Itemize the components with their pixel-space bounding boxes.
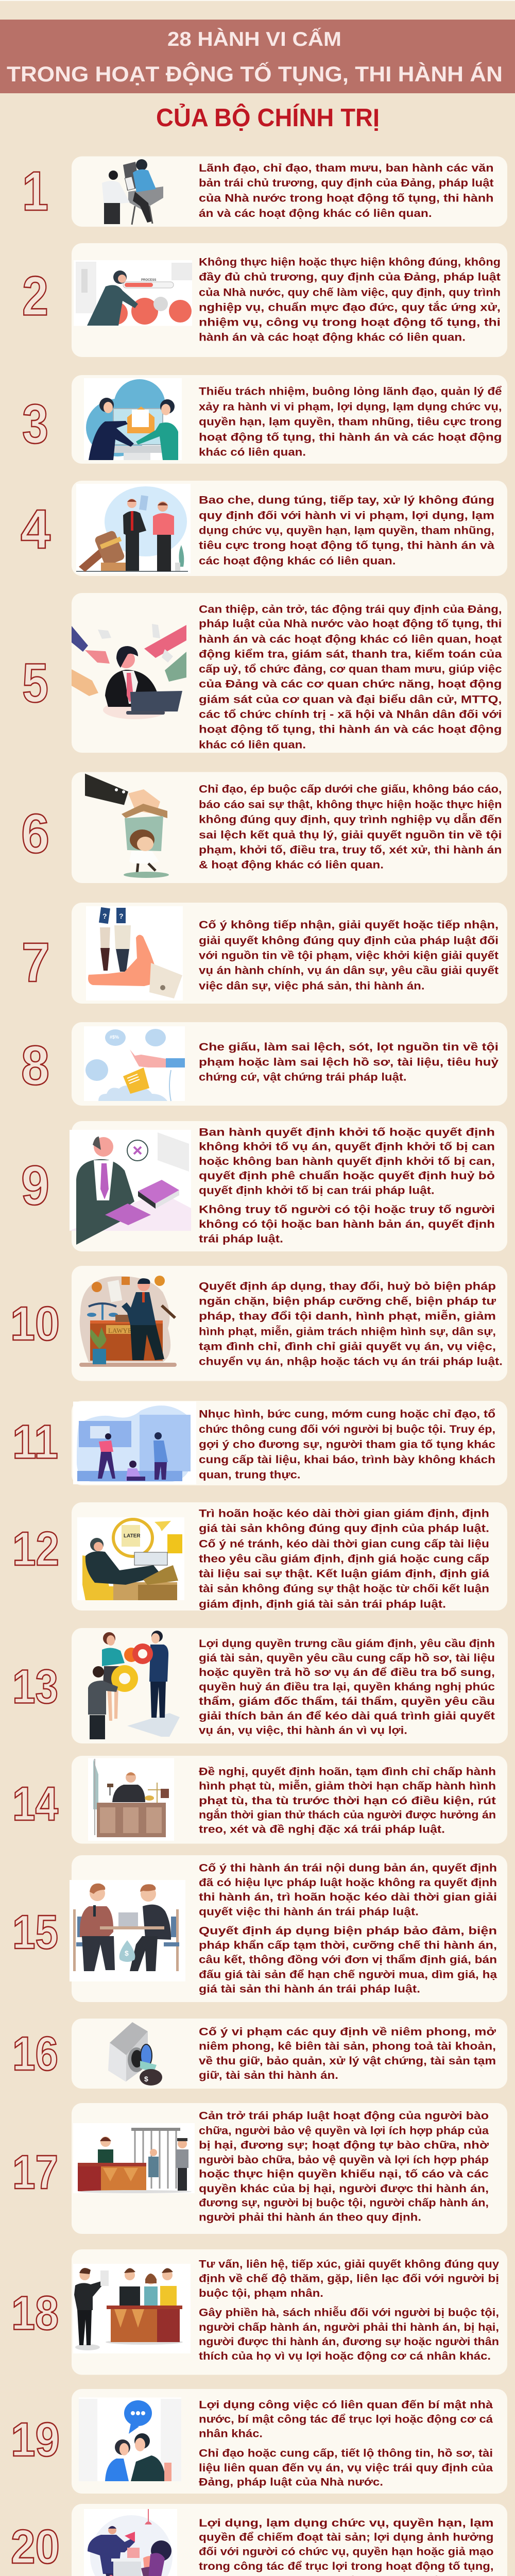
illustration: hand hiding a document [84,1026,185,1101]
number 10: 10 [10,1297,60,1350]
rule 20 text: đối với người có chức vụ, quyền hạn hoặc giả mạo [199,2546,493,2557]
rule 4 text: quy định đối với hành vi vi phạm, lợi dụng, lạm [199,510,494,521]
illustration: lawyer at a desk: LAWYER [108,1327,136,1334]
illustration: two men shaking hands before a monitor [84,378,182,460]
illustration: boss shouting through a megaphone [84,2509,177,2576]
rule 11 text: Nhục hình, bức cung, mớm cung hoặc chỉ đạo, tổ [199,1409,495,1420]
rule 17 text: Cản trở trái pháp luật hoạt động của người bào [199,2110,489,2122]
card 15 background [72,1855,507,2002]
rule 5 text: động kiểm tra, giám sát, thanh tra, kiểm toán của [199,648,502,660]
panel: rule 14 [12,1756,507,1843]
rule 1 text: án và các hoạt động khác có liên quan. [199,208,432,219]
rule 16 text [199,2026,496,2081]
illustration: man procrastinating by a clock [77,1517,184,1600]
rule 9 text: trái pháp luật. [199,1233,283,1245]
illustration: students in a school hallway [73,1401,196,1484]
rule 3 text: xảy ra hành vi vi phạm, lợi dụng, lạm dụng chức vụ, [199,401,502,413]
illustration: official rejecting at a desk [70,1130,191,1245]
panel: rule 3 [22,375,507,464]
rule 5 text: các tổ chức chính trị - xã hội và Nhân dân đối với [199,709,502,720]
rule 5 text: của Đảng và các cơ quan chức năng, hoạt động [199,678,502,690]
illustration: three colleagues with gears [88,1631,180,1739]
number 2: 2 [22,265,48,327]
rule 9 text [199,1126,495,1245]
rule 15 text: thi hành án, trì hoãn hoặc kéo dài thời gian giải [199,1891,497,1903]
illustration: two men exchanging a money bag [70,1880,185,1981]
rule 17 text: đương sự, người bị buộc tội, người chấp hành án, [199,2197,489,2209]
number 12: 12 [12,1522,59,1575]
rule 9 text: quyết định phê chuẩn hoặc quyết định huỷ bỏ [199,1170,495,1182]
card 4 background [72,481,507,576]
rule 2 text [199,257,501,343]
rule 12 text: giá tài sản không đúng quy định của pháp luật. [199,1523,489,1534]
rule 9 text: không có tội hoặc ban hành bản án, quyết định [199,1218,495,1230]
rule 10 text [199,1281,503,1367]
rule 6 text: không đúng quy định, quy trình nghiệp vụ dẫn đến [199,813,502,825]
number 4: 4 [21,498,50,560]
illustration: lawyer bench, jail bars and guard [73,2123,195,2193]
rule 10 text: pháp, thay đổi tội danh, hình phạt, miễn, giảm [199,1310,496,1322]
illustration: two people on a big hand [86,906,183,1001]
panel: rule 6 [21,772,507,883]
rule 17 text: người phải thi hành án theo quy định. [199,2211,421,2224]
number 6: 6 [21,802,49,865]
rule 2 text: nhiệm vụ, công vụ trong hoạt động tố tụng, thi [199,316,501,329]
card 6 background [72,772,507,883]
panel: rule 19 [11,2389,507,2494]
illustration: stressed man surrounded by hands [72,624,186,719]
rule 2 text: hành án và các hoạt động khác có liên quan. [199,332,466,343]
panel: rule 2 [22,243,507,357]
title line 2: TRONG HOẠT ĐỘNG TỐ TỤNG, THI HÀNH ÁN [7,61,503,86]
number 14: 14 [12,1777,58,1831]
illustration: two colleagues at a desk [102,159,163,225]
rule 6 text [199,783,502,871]
illustration: courtroom scene [73,2264,191,2353]
card 5 background [72,593,507,753]
illustration: gavel and two men [76,484,191,573]
rule 1 text: bản trái chủ trương, quy định của Đảng, pháp luật [199,177,493,189]
rule 15 text: Quyết định áp dụng biện pháp bảo đảm, biện [199,1925,497,1937]
illustration: washing machine and money bag: $ [144,2075,148,2083]
panel: rule 12 [12,1502,507,1611]
rule 2 text: Không thực hiện hoặc thực hiện không đúng, không [199,257,501,268]
rule 10 text: Quyết định áp dụng, thay đổi, huỷ bỏ biện pháp [199,1281,496,1292]
rule 15 text: đã có hiệu lực pháp luật hoặc không ra quyết định [199,1877,497,1889]
rule 15 text: đấu giá tài sản để hạn chế người mua, dìm giá, hạ [199,1969,497,1980]
rule 18 text: thích của họ vì vụ lợi hoặc động cơ cá nhân khác. [199,2350,491,2362]
subtitle: CỦA BỘ CHÍNH TRỊ [156,104,380,132]
rule 4 text: các hoạt động khác có liên quan. [199,555,396,567]
rule 11 text: gợi ý cho đương sự, người tham gia tố tụng khác [199,1438,495,1451]
illustration: washing machine and money bag [108,2022,162,2086]
rule 12 text: Cố ý né tránh, kéo dài thời gian cung cấp tài liệu [199,1538,489,1550]
rule 20 text [199,2517,493,2576]
panel: rule 1 [22,157,507,227]
rule 9 text: quyết định khởi tố bị can trái pháp luật. [199,1185,435,1196]
rule 3 text: quyền hạn, lạm quyền, tham nhũng, tiêu cực trong [199,416,502,428]
card 2 background [72,243,507,357]
rule 15 text [199,1862,497,1995]
rule 7 text: vụ án hành chính, vụ án dân sự, yêu cầu giải quyết [199,964,499,977]
illustration: man procrastinating by a clock: LATER [124,1533,141,1539]
rule 13 text: thẩm, giám đốc thẩm, tái thẩm, quyền yêu cầu [199,1696,495,1707]
rule 1 text: Lãnh đạo, chỉ đạo, tham mưu, ban hành các văn [199,162,493,174]
rule 5 text: Can thiệp, cản trở, tác động trái quy định của Đảng, [199,604,502,615]
panel: rule 9 [21,1121,507,1251]
number 3: 3 [22,393,48,455]
rule 11 text: cung cấp tài liệu, khai báo, trình bày không khách [199,1454,495,1466]
illustration: judge at the bench [88,1758,174,1841]
rule 15 text: giá tài sản thi hành án trái pháp luật. [199,1984,420,1995]
number 9: 9 [21,1154,49,1216]
rule 5 text: khác có liên quan. [199,739,306,751]
card 19 background [72,2389,507,2494]
card 9 background [72,1121,507,1251]
rule 19 text: Lợi dụng công việc có liên quan đến bí mật nhà [199,2399,493,2411]
rule 16 text: về thu giữ, bảo quản, xử lý vật chứng, tài sản tạm [199,2055,496,2067]
rule 13 text: Lợi dụng quyền trưng cầu giám định, yêu cầu định [199,1638,495,1650]
card 1 background [72,157,507,227]
panel: rule 7 [22,903,507,1004]
rule 6 text: báo cáo sai sự thật, không thực hiện hoặc thực hiện [199,799,502,811]
rule 8 text: phạm hoặc làm sai lệch hồ sơ, tài liệu, tiêu huỷ [199,1056,499,1069]
rule 13 text: quyền huỷ án điều tra lại, quyền kháng nghị phúc [199,1681,495,1693]
number 15: 15 [12,1905,58,1959]
rule 19 text: Đảng, pháp luật của Nhà nước. [199,2476,383,2488]
number 8: 8 [21,1034,49,1096]
rule 3 text: khác có liên quan. [199,446,306,459]
illustration: hand hiding a document: #$% [110,1035,119,1040]
rule 6 text: & hoạt động khác có liên quan. [199,859,384,871]
illustration: man adjusting process gears: PROCESS [141,279,156,282]
rule 3 text: hoạt động tố tụng, thi hành án và các hoạt động [199,432,502,443]
rule 8 text: chứng cứ, vật chứng trái pháp luật. [199,1072,407,1083]
rule 3 text: Thiếu trách nhiệm, buông lỏng lãnh đạo, quản lý để [199,385,502,398]
rule 8 text [199,1041,499,1083]
rule 5 text: hành án và các hoạt động khác có liên quan, hoạt [199,634,502,645]
rule 15 text: quyết việc thi hành án trái pháp luật. [199,1906,419,1918]
header band [0,20,515,93]
rule 20 text: trong công tác để trục lợi trong hoạt động tố tụng, [199,2561,493,2572]
card 10 background [72,1266,507,1381]
rule 4 text: tiêu cực trong hoạt động tố tụng, thi hành án và [199,540,494,551]
panel: rule 16 [12,2019,507,2089]
rule 14 text: treo, xét và đề nghị đặc xá trái pháp luật. [199,1824,445,1835]
panel: rule 5 [22,593,507,753]
illustration: two people whispering [79,2398,181,2481]
rule 13 text: hoặc quyền trả hồ sơ vụ án để điều tra bổ sung, [199,1667,495,1679]
rule 13 text: giá tài sản, quyền yêu cầu cung cấp hồ sơ, tài liệu [199,1652,495,1664]
rule 20 text: quyền để chiếm đoạt tài sản; lợi dụng ảnh hưởng [199,2532,493,2543]
rule 7 text: giải quyết không đúng quy định của pháp luật đối [199,935,499,947]
card 7 background [72,903,507,1004]
rule 9 text: không khởi tố vụ án, quyết định khởi tố bị can [199,1141,495,1153]
panel: rule 4 [21,481,507,576]
rule 18 text: Gây phiền hà, sách nhiễu đối với người bị buộc tội, [199,2306,499,2318]
illustration: man adjusting process gears [74,260,192,326]
rule 11 text: chức thông cung đối với người bị buộc tội. Truy ép, [199,1423,495,1435]
panel: rule 17 [12,2103,507,2234]
rule 15 text: câu kết, thông đồng với đơn vị thẩm định giá, bán [199,1954,497,1966]
number 5: 5 [22,651,48,714]
card 18 background [72,2249,507,2375]
rule 11 text: quan, trung thực. [199,1469,301,1481]
rule 19 text: liệu liên quan đến vụ án, vụ việc trái quy định của [199,2462,493,2474]
rule 16 text: Cố ý vi phạm các quy định về niêm phong, mở [199,2026,496,2038]
rule 14 text: hình phạt tù, miễn, giảm thời hạn chấp hành hình [199,1780,496,1792]
rule 17 text [199,2110,489,2224]
title line 1: 28 HÀNH VI CẤM [167,28,341,50]
rule 12 text: theo yêu cầu giám định, định giá hoặc cung cấp [199,1553,489,1565]
rule 18 text: buộc tội, phạm nhân. [199,2287,323,2299]
rule 13 text: vụ án, vụ việc, thi hành án vì vụ lợi. [199,1725,407,1736]
number 19: 19 [11,2413,60,2466]
card 17 background [72,2103,507,2234]
rule 12 text [199,1507,489,1611]
rule 8 text: Che giấu, làm sai lệch, sót, lọt nguồn tin về tội [199,1041,499,1053]
rule 19 text [199,2399,493,2488]
rule 9 text: hoặc không ban hành quyết định khởi tố bị can, [199,1156,495,1167]
rule 3 text [199,385,502,459]
rule 12 text: giám định, định giá tài sản trái pháp luật. [199,1598,446,1611]
rule 14 text [199,1766,496,1835]
rule 19 text: Chỉ đạo hoặc cung cấp, tiết lộ thông tin, hồ sơ, tài [199,2447,493,2460]
rule 9 text: Ban hành quyết định khởi tố hoặc quyết định [199,1126,495,1139]
rule 12 text: tài liệu sai sự thật. Kết luận giám định, định giá [199,1568,489,1580]
panel: rule 11 [12,1401,507,1485]
panel: rule 18 [11,2249,507,2375]
rule 4 text: Bao che, dung túng, tiếp tay, xử lý không đúng [199,495,494,506]
rule 7 text: việc dân sự, việc phá sản, thi hành án. [199,980,424,992]
illustration: two men exchanging a money bag: $ [125,1949,129,1957]
rule 14 text: ngắn thời gian thử thách của người được hưởng án [199,1808,496,1821]
rule 6 text: phạm, khởi tố, điều tra, truy tố, xét xử, thi hành án [199,844,502,856]
card 13 background [72,1628,508,1743]
rule 13 text [199,1638,495,1736]
illustration: puppet man lifted by a hand [85,774,169,878]
number 18: 18 [11,2286,59,2340]
number 20: 20 [11,2520,60,2573]
rule 10 text: tạm đình chỉ, đình chỉ giải quyết vụ án, vụ việc, [199,1341,496,1353]
rule 17 text: chữa, người bảo vệ quyền và lợi ích hợp pháp của [199,2125,489,2137]
card 3 background [72,375,507,464]
rule 7 text [199,919,499,992]
number 1: 1 [22,160,48,222]
rule 9 text: Không truy tố người có tội hoặc truy tố người [199,1204,495,1216]
rule 5 text: giám sát của cơ quan và đại biểu dân cử, MTTQ, [199,693,502,706]
illustration: two people on a big hand: ? [102,912,107,920]
rule 17 text: bị hại, đương sự; hoạt động tự bào chữa, nhờ [199,2139,489,2151]
card 14 background [72,1756,507,1843]
rule 5 text: cấp uỷ, tổ chức đảng, cơ quan tham mưu, giúp việc [199,664,502,675]
card 16 background [72,2019,507,2089]
rule 18 text: người được thi hành án, đương sự hoặc người thân [199,2336,499,2348]
rule 17 text: người bào chữa, bảo vệ quyền và lợi ích hợp pháp [199,2154,489,2166]
rule 16 text: niêm phong, kê biên tài sản, phong toả tài khoản, [199,2040,496,2053]
rule 12 text: tài sản không đúng sự thật hoặc từ chối kết luận [199,1583,489,1595]
number 11: 11 [12,1415,58,1468]
panel: rule 20 [11,2504,507,2576]
number 16: 16 [12,2027,58,2080]
number 17: 17 [12,2145,58,2199]
number 13: 13 [12,1660,58,1714]
panel: rule 10 [10,1266,507,1381]
rule 14 text: Đề nghị, quyết định hoãn, tạm đình chỉ chấp hành [199,1766,496,1777]
rule 1 text [199,162,493,219]
rule 2 text: nghiệp vụ, chuẩn mực đạo đức, quy tắc ứng xử, [199,301,501,313]
rule 5 text [199,604,502,751]
panel: rule 15 [12,1855,507,2002]
rule 16 text: giữ, tài sản thi hành án. [199,2070,338,2081]
rule 13 text: giải thích bản án để kéo dài quá trình giải quyết [199,1710,495,1722]
rule 19 text: nước, bí mật công tác để trục lợi hoặc động cơ cá [199,2413,493,2426]
rule 18 text: người chấp hành án, người phải thi hành án, bị hại, [199,2321,499,2333]
rule 18 text [199,2259,499,2362]
rule 15 text: pháp khẩn cấp tạm thời, cưỡng chế thi hành án, [199,1939,497,1952]
card 8 background [72,1022,507,1106]
rule 17 text: quyền khác của bị hại, người được thi hành án, [199,2183,489,2195]
rule 11 text [199,1409,495,1481]
illustration: two people on a big hand: ? [119,912,124,920]
rule 5 text: hoạt động tố tụng, thi hành án và các hoạt động [199,723,502,736]
number 7: 7 [22,931,50,993]
rule 15 text: Cố ý thi hành án trái nội dung bản án, quyết định [199,1862,497,1874]
rule 17 text: hoặc thực hiện quyền khiếu nại, tố cáo và các [199,2168,489,2180]
rule 12 text: Trì hoãn hoặc kéo dài thời gian giám định, định [199,1507,489,1520]
rule 2 text: đầy đủ chủ trương, quy định của Đảng, pháp luật [199,271,501,283]
card 11 background [72,1401,507,1485]
card 20 background [72,2504,507,2576]
rule 6 text: Chỉ đạo, ép buộc cấp dưới che giấu, không báo cáo, [199,783,502,795]
rule 1 text: của Nhà nước trong hoạt động tố tụng, thi hành [199,193,493,204]
rule 10 text: hình phạt, miễn, giảm trách nhiệm hình sự, dân sự, [199,1325,496,1337]
rule 4 text [199,495,494,567]
rule 7 text: Cố ý không tiếp nhận, giải quyết hoặc tiếp nhận, [199,919,499,931]
rule 10 text: chuyển vụ án, nhập hoặc tách vụ án trái pháp luật. [199,1356,503,1367]
panel: rule 8 [21,1022,507,1106]
rule 6 text: sai lệch kết quả thụ lý, giải quyết nguồn tin về tội [199,829,502,841]
rule 19 text: nhân khác. [199,2428,263,2440]
card 12 background [72,1502,507,1611]
illustration: lawyer at a desk [79,1276,177,1367]
rule 14 text: phạt tù, tha tù trước thời hạn có điều kiện, rút [199,1795,496,1807]
rule 7 text: với nguồn tin về tội phạm, việc khởi kiện giải quyết [199,950,499,961]
rule 10 text: ngăn chặn, biện pháp cưỡng chế, biện pháp tư [199,1295,496,1308]
rule 5 text: pháp luật của Nhà nước vào hoạt động tố tụng, thi [199,618,502,630]
rule 18 text: Tư vấn, liên hệ, tiếp xúc, giải quyết không đúng quy [199,2259,499,2270]
rule 20 text: Lợi dụng, lạm dụng chức vụ, quyền hạn, lạm [199,2517,493,2529]
panel: rule 13 [12,1628,508,1743]
rule 18 text: định về chế độ thăm, gặp, liên lạc đối với người bị [199,2273,499,2284]
rule 4 text: dụng chức vụ, quyền hạn, lạm quyền, tham nhũng, [199,524,494,537]
rule 2 text: của Nhà nước, quy chế làm việc, quy định, quy trình [199,286,501,299]
